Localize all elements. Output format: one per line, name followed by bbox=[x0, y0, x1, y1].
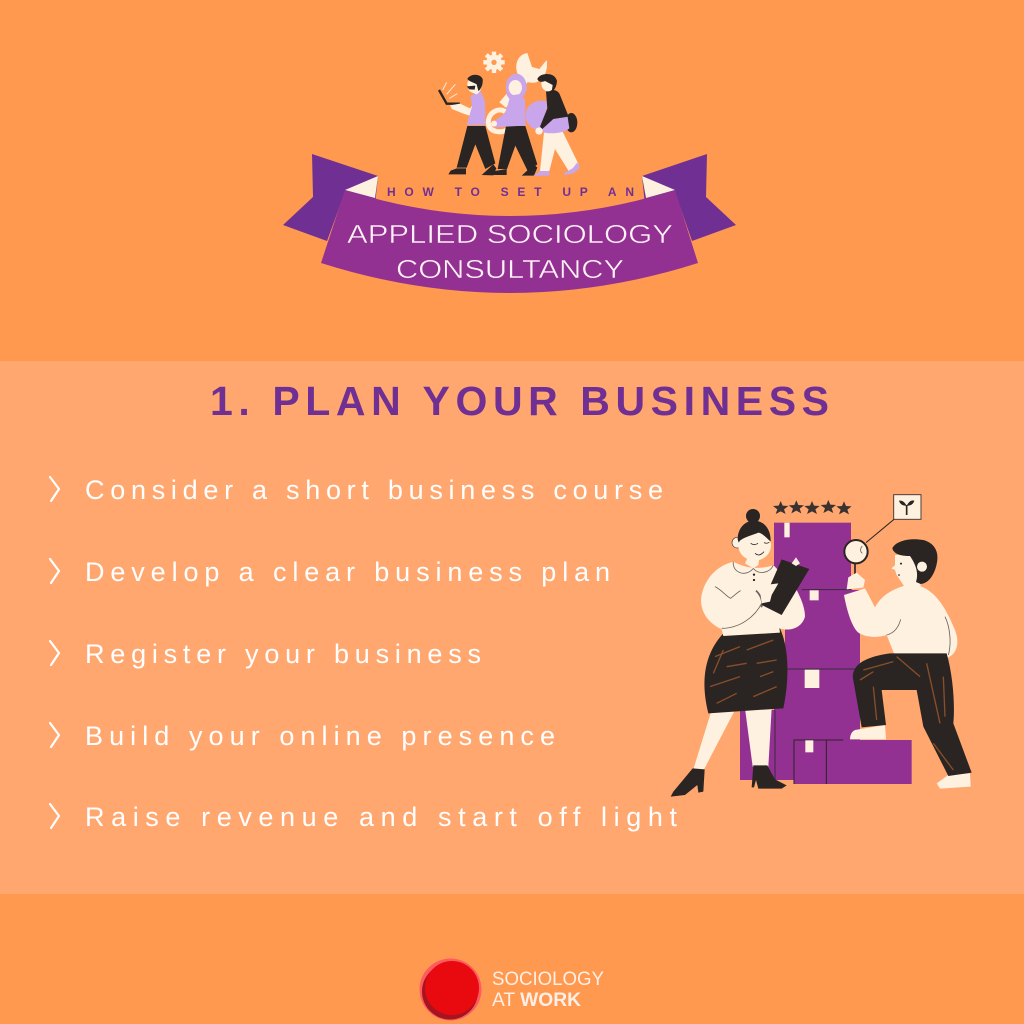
ribbon: right tail bbox=[642, 154, 736, 241]
illustration: three people carrying tools bbox=[439, 52, 580, 176]
rating stars bbox=[773, 500, 852, 514]
icon: seedling tag bbox=[866, 495, 921, 543]
figure: woman with clipboard bbox=[671, 509, 809, 797]
list item 5: Raise revenue and start off light bbox=[85, 802, 677, 832]
ribbon: right fold bbox=[642, 176, 675, 198]
wordmark: at work: AT WORK bbox=[492, 990, 581, 1011]
list item 2: Develop a clear business plan bbox=[85, 557, 610, 587]
logo: Sociology at Work bbox=[420, 958, 604, 1020]
heading: applied sociology: APPLIED SOCIOLOGY bbox=[347, 219, 673, 249]
heading: how to set up an: HOW TO SET UP AN bbox=[387, 185, 634, 199]
banner ribbon bbox=[283, 154, 736, 293]
figure: woman with headscarf bbox=[491, 74, 537, 176]
icon: red circle bbox=[420, 958, 482, 1020]
panel: content band bbox=[0, 361, 1024, 894]
figure: man with laptop bbox=[439, 75, 496, 175]
upper body of man bbox=[844, 539, 957, 660]
icon: gear bbox=[483, 52, 505, 73]
boxes stack bbox=[740, 523, 912, 784]
list item 1: Consider a short business course bbox=[85, 475, 663, 505]
checklist bbox=[50, 475, 677, 832]
list item 3: Register your business bbox=[85, 639, 481, 669]
upper body of woman bbox=[701, 509, 809, 636]
ribbon: main band bbox=[321, 190, 698, 293]
section heading: 1. PLAN YOUR BUSINESS bbox=[210, 378, 829, 424]
ribbon: left fold bbox=[345, 176, 378, 198]
ribbon: left tail bbox=[283, 154, 378, 241]
heading: consultancy: CONSULTANCY bbox=[396, 254, 624, 284]
list item 4: Build your online presence bbox=[85, 721, 555, 751]
figure: person carrying a bulb bbox=[526, 74, 580, 176]
illustration: two people inspecting boxes bbox=[671, 495, 972, 797]
wordmark: sociology: SOCIOLOGY bbox=[492, 969, 604, 990]
figure: man with magnifying glass bbox=[844, 539, 972, 789]
icon: wrench bbox=[488, 53, 547, 132]
